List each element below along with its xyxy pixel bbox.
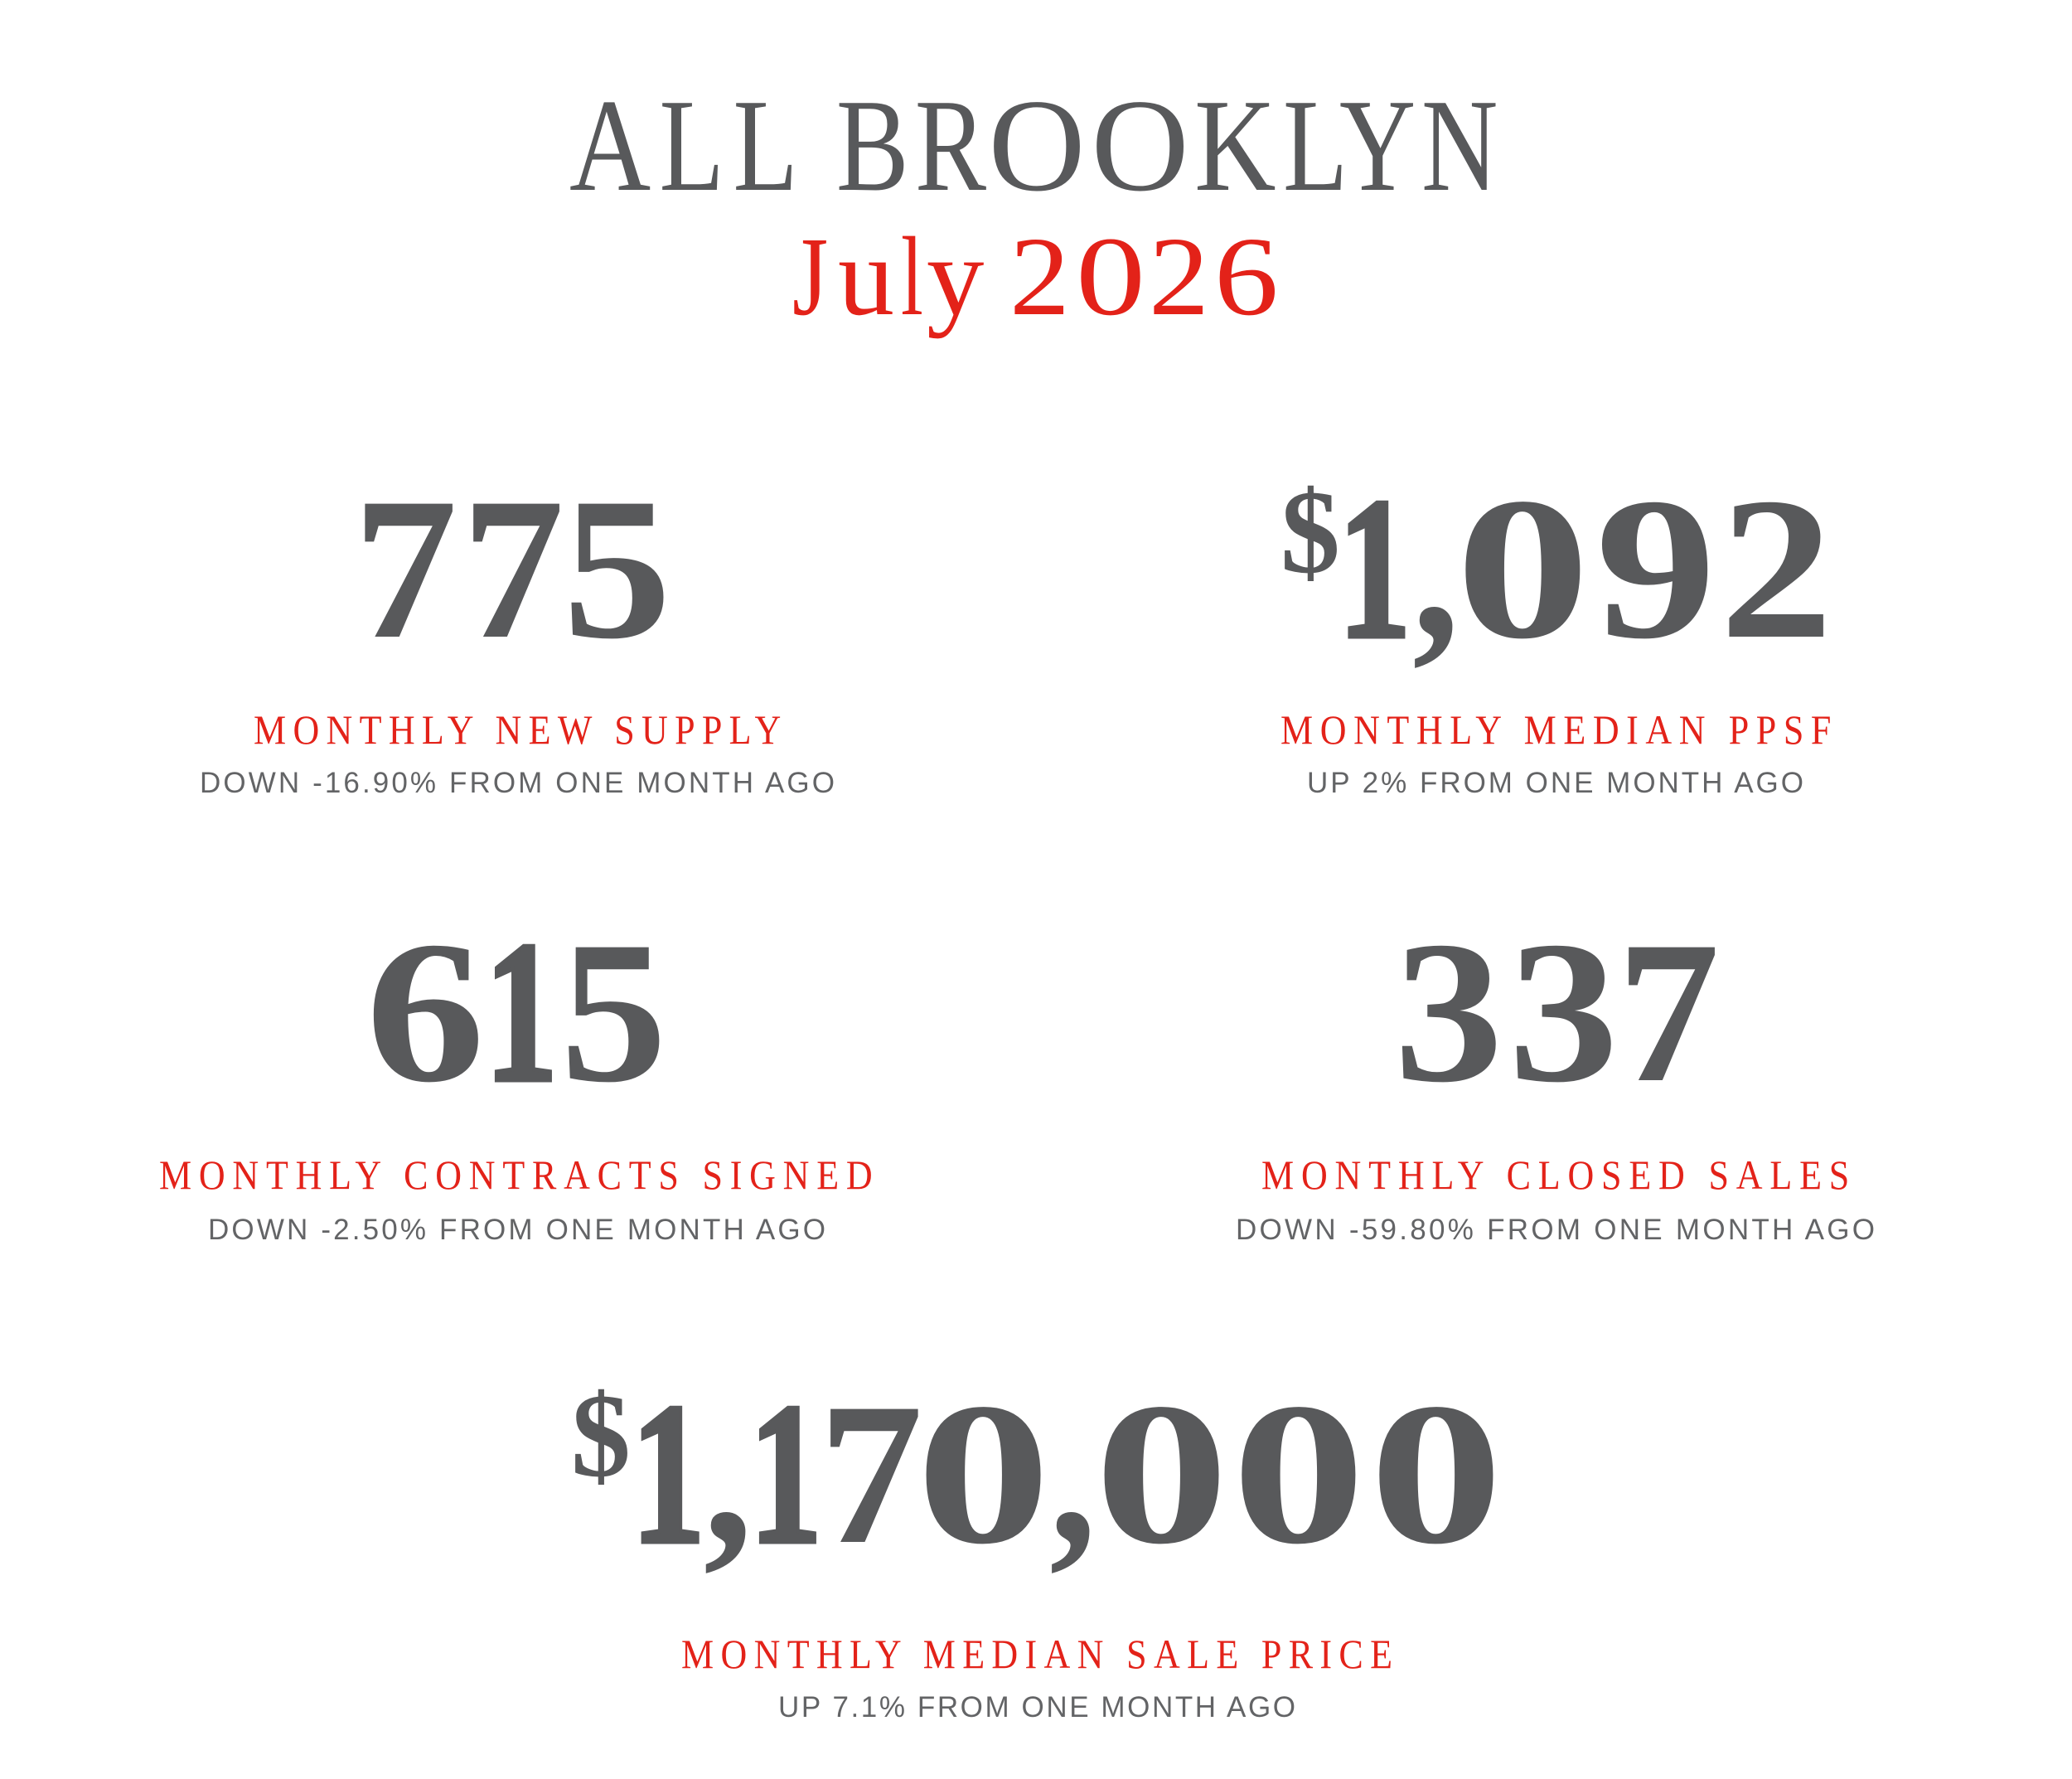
value: 7 [462,456,564,681]
value: , [704,1362,753,1587]
value: 2 [1720,457,1833,681]
metric label: MONTHLY NEW SUPPLY [254,707,781,754]
heading: all brooklyn: N [1421,73,1498,219]
metric label: MONTHLY CONTRACTS SIGNED [159,1152,873,1199]
value: , [1049,1362,1097,1587]
heading: date: y [927,214,985,339]
panel: monthly new supply [200,455,835,799]
heading: all brooklyn [569,71,1498,220]
heading: all brooklyn: R [915,72,986,219]
value: 1 [484,899,558,1125]
value: 1 [631,1360,705,1587]
value: 0 [1369,1361,1503,1587]
heading: all brooklyn: O [988,71,1086,219]
change text: DOWN -2.50% FROM ONE MONTH AGO [208,1214,825,1246]
heading: all brooklyn: L [1283,73,1348,219]
panel: monthly closed sales [1236,899,1875,1246]
heading: date: 6 [1214,214,1279,339]
heading: all brooklyn: L [733,73,798,219]
value [353,455,671,681]
panel: monthly contracts signed [159,899,873,1246]
change text: UP 2% FROM ONE MONTH AGO [1307,767,1803,799]
value: 0 [1455,456,1590,681]
heading: all brooklyn: A [569,73,651,220]
metric label: MONTHLY MEDIAN PPSF [1280,707,1831,754]
value: 1 [1338,456,1411,681]
change text: DOWN -59.80% FROM ONE MONTH AGO [1236,1214,1875,1246]
dollar sign: $ [1280,467,1340,599]
value: , [1412,457,1460,681]
heading: all brooklyn: O [1091,73,1189,220]
panel: monthly median ppsf [1280,456,1833,799]
heading: date: u [838,215,894,339]
value: 3 [1508,899,1619,1125]
value [631,1360,1503,1587]
panel: monthly median sale price [571,1360,1503,1723]
value: 7 [819,1360,923,1586]
value: 6 [366,899,485,1124]
heading: date: 2 [1009,214,1070,339]
value: 5 [563,456,671,681]
heading: date: l [901,214,923,339]
heading: all brooklyn: Y [1339,73,1416,219]
value: 0 [1232,1361,1366,1587]
heading: all brooklyn: K [1194,72,1276,220]
change text: DOWN -16.90% FROM ONE MONTH AGO [200,767,835,799]
metric label: MONTHLY MEDIAN SALE PRICE [681,1631,1392,1678]
value: 3 [1394,899,1503,1125]
metric label: MONTHLY CLOSED SALES [1261,1152,1849,1199]
value [1338,456,1833,681]
value: 7 [353,455,457,681]
heading: date [792,213,1279,339]
value: 7 [1617,899,1720,1125]
value: 0 [916,1361,1051,1587]
title [569,71,1498,339]
value [1394,899,1720,1125]
dollar sign: $ [571,1370,631,1502]
change text: UP 7.1% FROM ONE MONTH AGO [778,1691,1295,1723]
heading: date: J [792,213,828,339]
value: 5 [560,900,667,1125]
value [366,899,667,1125]
heading: all brooklyn: L [660,73,724,219]
heading: date: 0 [1076,215,1145,339]
heading: date: 2 [1149,214,1209,339]
heading: all brooklyn: B [836,71,909,219]
value: 0 [1094,1361,1229,1587]
value: 1 [749,1361,822,1587]
value: 9 [1595,456,1716,681]
